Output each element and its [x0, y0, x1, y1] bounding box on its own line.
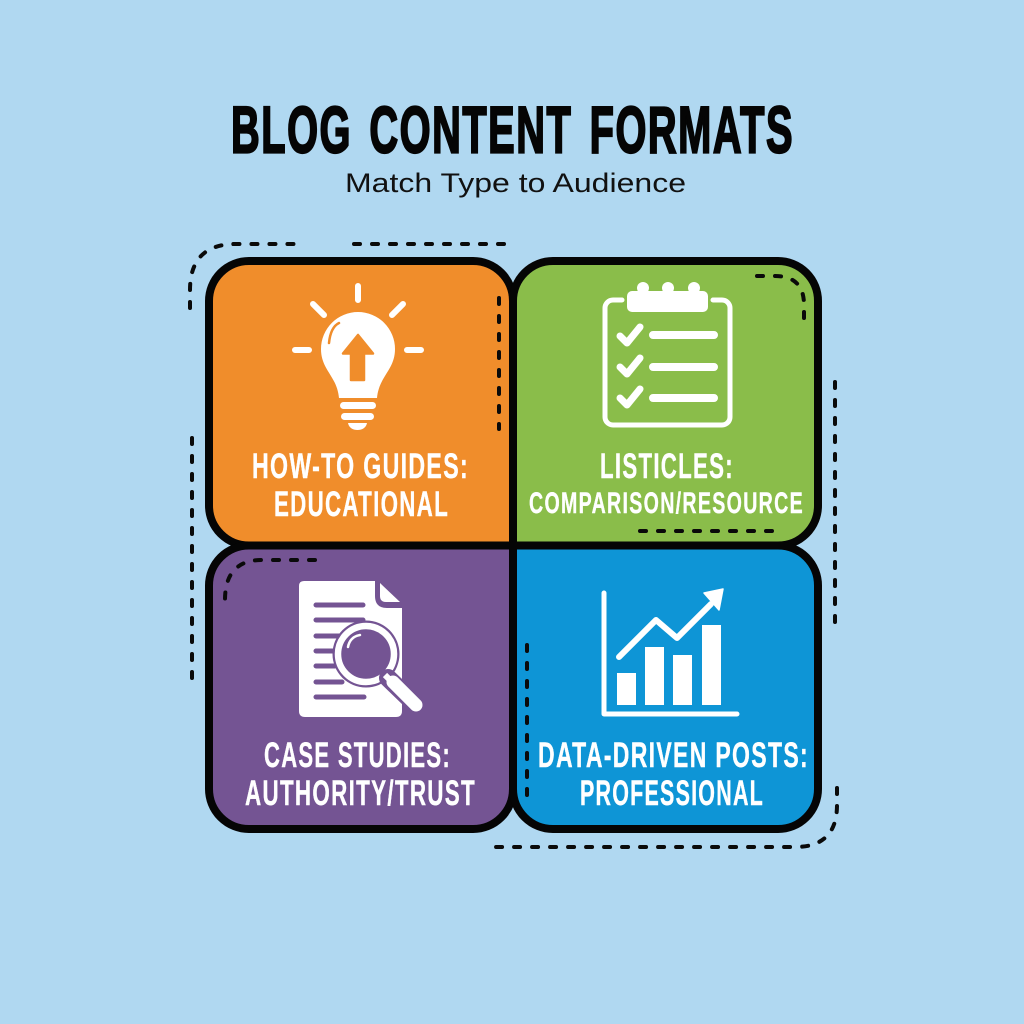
icon: light bulb with arrow	[295, 286, 421, 430]
label: data-driven posts: DATA-DRIVEN POSTS:	[538, 736, 809, 775]
panel: case studies	[209, 546, 513, 829]
subtitle: Match Type to Audience	[345, 168, 686, 198]
label: how-to guides: HOW-TO GUIDES:	[252, 447, 469, 486]
icon: document with magnifier	[299, 581, 417, 717]
icon: bar chart with rising arrow	[604, 589, 737, 714]
panel: listicles	[513, 261, 818, 546]
dashed accent lines	[190, 244, 837, 847]
label: educational: EDUCATIONAL	[274, 485, 449, 524]
label: case studies: CASE STUDIES:	[264, 736, 451, 775]
label: professional: PROFESSIONAL	[580, 774, 764, 813]
panel: data-driven posts	[513, 546, 818, 829]
panel: how-to guides	[209, 261, 513, 546]
label: authority/trust: AUTHORITY/TRUST	[245, 774, 476, 813]
label: comparison/resource: COMPARISON/RESOURCE	[529, 487, 804, 520]
label: listicles: LISTICLES:	[600, 447, 734, 486]
icon: checklist clipboard	[605, 282, 730, 425]
